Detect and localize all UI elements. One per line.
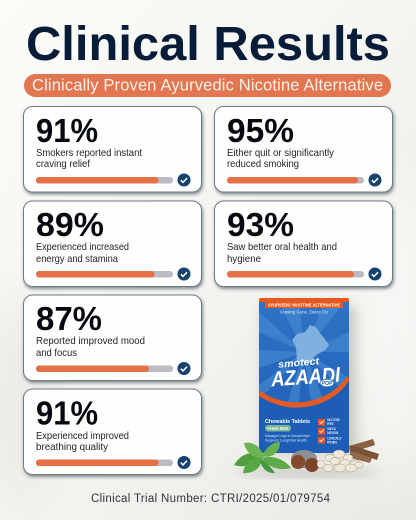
product pack with ingredients: smotect — [278, 356, 320, 371]
panel: 87% mood and focus: Reported improved mood — [36, 336, 145, 347]
panel: 95% quit or reduced — [214, 106, 392, 192]
panel: 95% quit or reduced: 95% — [227, 112, 294, 149]
panel: 91% craving relief: craving relief — [36, 159, 90, 170]
panel: 95% quit or reduced: reduced smoking — [227, 159, 299, 170]
licorice sticks — [349, 439, 379, 463]
panel: 95% quit or reduced: Either quit or significantly — [227, 148, 335, 159]
product pack with ingredients: Manages Urge to Smoke/Vape — [265, 434, 310, 438]
product pack with ingredients: POP — [322, 381, 333, 387]
product pack with ingredients: PROVEN — [327, 440, 338, 444]
panel: 91% craving relief — [24, 106, 202, 192]
panel: 93% oral health: hygiene — [227, 254, 261, 265]
panel: 91% breathing quality: 91% — [36, 394, 98, 432]
panel: 89% energy and stamina — [24, 201, 202, 286]
subtitle pill: Clinically Proven Ayurvedic Nicotine Alternative — [32, 76, 383, 94]
product pack with ingredients — [234, 298, 380, 476]
product pack with ingredients: SAFE & — [327, 427, 337, 431]
product pack with ingredients: Chewable Tablets — [265, 419, 310, 425]
panel: 89% energy and stamina: 89% — [36, 206, 104, 243]
panel: 91% craving relief: Smokers reported instant — [36, 148, 142, 159]
panel: 91% breathing quality — [24, 389, 202, 474]
product pack with ingredients: FREE — [327, 422, 335, 426]
product pack with ingredients: NICOTINE — [327, 418, 341, 422]
panel: 89% energy and stamina: energy and stamina — [36, 254, 118, 265]
panel: 91% craving relief: 91% — [36, 112, 98, 149]
product pack with ingredients: NATURAL — [327, 431, 339, 435]
panel: 93% oral health: Saw better oral health and — [227, 242, 337, 253]
clinical trial number: Clinical Trial Number: CTRI/2025/01/079754 — [91, 493, 331, 505]
panel: 87% mood and focus — [24, 295, 202, 380]
mint leaves — [234, 442, 291, 473]
panel: 91% breathing quality: breathing quality — [36, 442, 109, 453]
panel: 93% oral health: 93% — [227, 206, 294, 243]
panel: 93% oral health — [214, 201, 392, 286]
product pack with ingredients: Supports Lung/Oral Health — [265, 438, 307, 442]
panel: 91% breathing quality: Experienced improved — [36, 431, 129, 442]
product pack with ingredients: Fresh Mint — [267, 426, 289, 431]
herbal tablets — [291, 450, 319, 472]
product pack with ingredients: AYURVEDIC NICOTINE ALTERNATIVE — [268, 302, 340, 308]
panel: 89% energy and stamina: Experienced increased — [36, 242, 129, 253]
title: Clinical Results — [26, 18, 390, 71]
white tablets — [317, 450, 363, 472]
product pack with ingredients: AZAADI — [270, 364, 342, 391]
product pack with ingredients: Craving Gone, Detox On — [280, 310, 329, 314]
product pack with ingredients: CLINICALLY — [327, 436, 343, 440]
panel: 87% mood and focus: and focus — [36, 348, 77, 359]
panel: 87% mood and focus: 87% — [36, 300, 102, 337]
